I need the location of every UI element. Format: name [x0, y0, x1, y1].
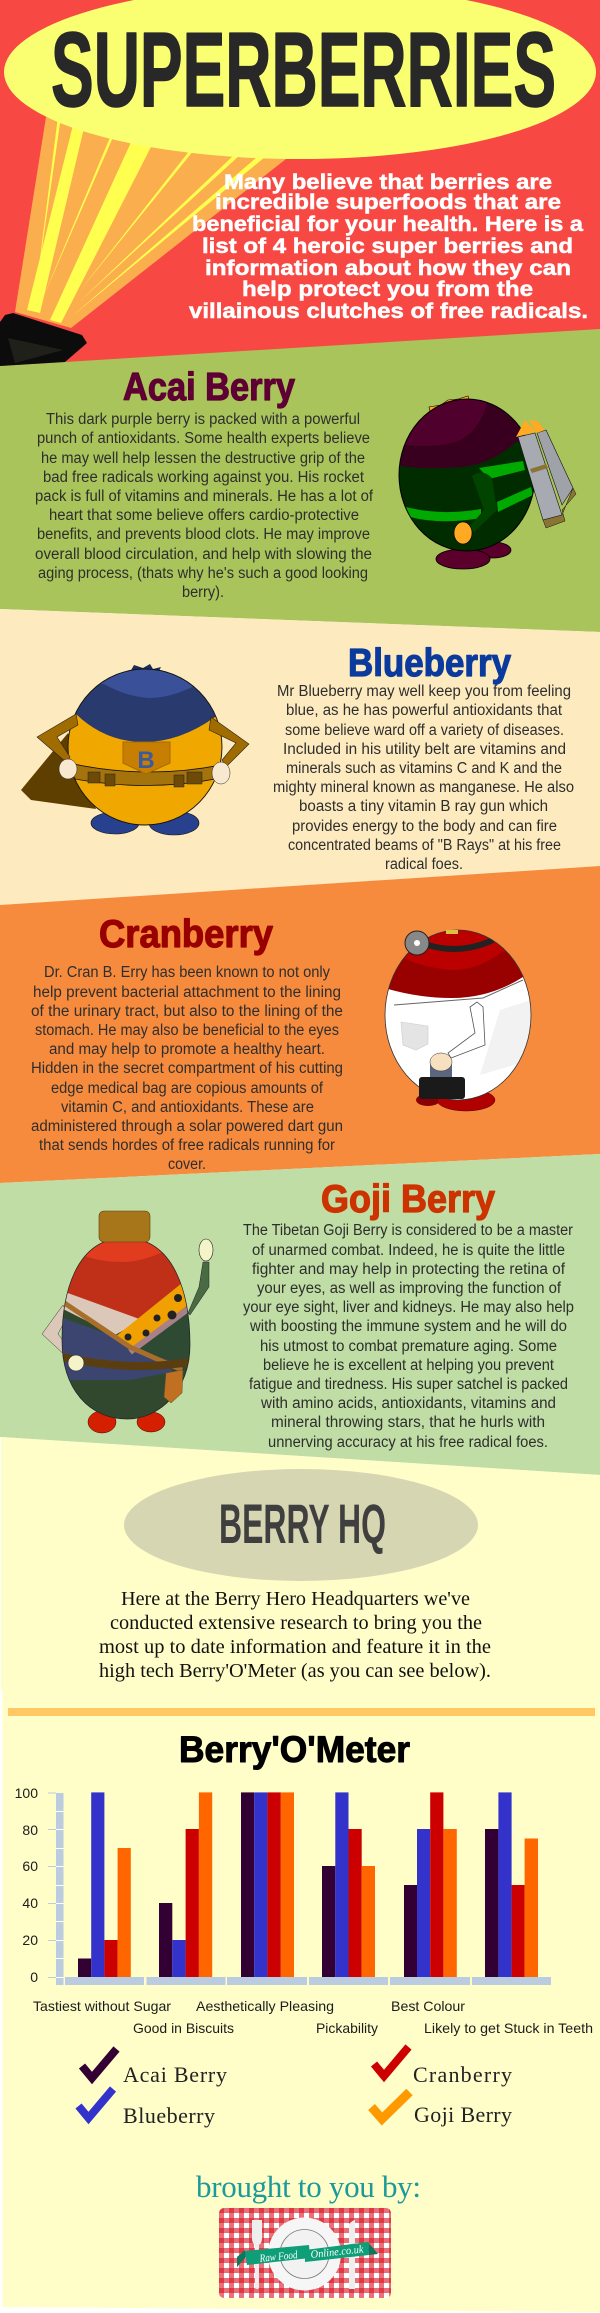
text block: goji berry description: fighter and may help in protecting the retina of	[252, 1261, 566, 1278]
panel: acai berry band	[0, 329, 600, 632]
icon: acai berry hero	[395, 390, 576, 569]
text block: goji berry description: his utmost to combat premature aging. Some	[260, 1338, 557, 1355]
legend: blueberry: Blueberry	[123, 2103, 215, 2128]
text block: intro: help protect you from the	[242, 278, 533, 301]
text block: cranberry description: and may help to promote a healthy heart.	[49, 1041, 325, 1058]
text block: intro: list of 4 heroic super berries and	[202, 235, 573, 258]
legend: acai berry: Acai Berry	[123, 2062, 227, 2087]
text block: goji berry description: with amino acids, antioxidants, vitamins and	[260, 1395, 556, 1412]
text block: acai berry description: benefits, and prevents blood clots. He may improve	[37, 526, 370, 543]
text block: cranberry description: help prevent bacterial attachment to the lining	[33, 984, 341, 1001]
chart axis frame	[48, 1792, 551, 1985]
heading: acai berry: Acai Berry	[123, 366, 295, 409]
legend: goji berry	[372, 2092, 512, 2127]
icon: title ellipse	[4, 0, 596, 159]
legend	[78, 2047, 512, 2128]
bars: good in biscuits	[159, 1792, 212, 1977]
text block: cranberry description: stomach. He may also be beneficial to the eyes	[35, 1022, 339, 1039]
text block: intro: beneficial for your health. Here is a	[192, 213, 583, 236]
text block: brought to you by: brought to you by:	[196, 2169, 421, 2204]
chart y axis labels: 0	[30, 1969, 38, 1985]
text block: goji berry description: mineral throwing stars, that he hurls with	[271, 1414, 545, 1431]
text block: blueberry description: blue, as he has powerful antioxidants that	[286, 702, 563, 719]
chart x axis labels: Tastiest without Sugar	[33, 1998, 171, 2014]
text block: acai berry description: aging process, (thats why he's such a good looking	[38, 565, 368, 582]
heading: goji berry: Goji Berry	[321, 1178, 495, 1221]
text block: cranberry description: of the urinary tract, but also to the lining of the	[31, 1003, 343, 1020]
text block: intro: villainous clutches of free radicals.	[189, 300, 588, 323]
legend: acai berry	[82, 2049, 227, 2087]
icon: blueberry hero: B	[137, 747, 155, 774]
text block: blueberry description: provides energy to the body and can fire	[292, 818, 557, 835]
text block: acai berry description	[35, 411, 374, 601]
legend: blueberry	[78, 2089, 215, 2128]
bars: likely to get stuck in teeth	[485, 1792, 538, 1977]
panel: header background	[0, 0, 600, 370]
legend: goji berry: Goji Berry	[414, 2102, 512, 2127]
text block: goji berry description	[243, 1222, 574, 1451]
text block: cranberry description: administered through a solar powered dart gun	[31, 1118, 343, 1135]
bars: pickability	[322, 1792, 375, 1977]
icon: flashlight	[0, 313, 87, 366]
text block: berry hq description: conducted extensive research to bring you the	[110, 1612, 482, 1634]
panel: goji berry band	[0, 1154, 600, 1475]
text block: acai berry description: bad free radicals working against you. His rocket	[43, 469, 365, 486]
text block: acai berry description: heart that some believe offers cardio-protective	[49, 507, 359, 524]
text block: blueberry description: some believe ward off a variety of diseases.	[285, 722, 564, 739]
icon: raw food online logo	[219, 2208, 391, 2298]
icon: raw food online logo: Online.co.uk	[310, 2243, 365, 2261]
text block: goji berry description: believe he is excellent at helping you prevent	[263, 1357, 555, 1374]
text block: berry hq description	[99, 1588, 491, 1682]
text block: cranberry description	[31, 964, 343, 1173]
text block: blueberry description: Mr Blueberry may well keep you from feeling	[277, 683, 571, 700]
text block: cranberry description: vitamin C, and antioxidants. These are	[61, 1099, 314, 1116]
text block: blueberry description	[273, 683, 574, 873]
text block: acai berry description: punch of antioxidants. Some health experts believe	[37, 430, 370, 447]
chart y axis labels: 20	[22, 1932, 38, 1948]
chart x axis labels: Pickability	[316, 2020, 378, 2036]
bars: best colour	[404, 1792, 457, 1977]
panel: cranberry band	[0, 866, 600, 1183]
bars: aesthetically pleasing	[241, 1792, 294, 1977]
icon: spotlight beam	[15, 117, 286, 328]
text block: intro	[189, 171, 588, 323]
text block: goji berry description: The Tibetan Goji Berry is considered to be a master	[243, 1222, 573, 1239]
chart x axis labels	[33, 1998, 593, 2036]
text block: goji berry description: your eye sight, liver and kidneys. He may also help	[243, 1299, 574, 1316]
chart y axis labels	[15, 1785, 38, 1985]
chart y axis labels: 80	[22, 1822, 38, 1838]
chart x axis labels: Aesthetically Pleasing	[196, 1998, 334, 2014]
text block: goji berry description: of unarmed combat. Indeed, he is quite the little	[252, 1242, 565, 1259]
text block: berry hq description: high tech Berry'O'Meter (as you can see below).	[99, 1660, 491, 1682]
panel: berry hq background	[1, 1437, 600, 2312]
text block: cranberry description: Hidden in the secret compartment of his cutting	[31, 1060, 343, 1077]
text block: acai berry description: overall blood circulation, and help with slowing the	[35, 546, 372, 563]
text block: cranberry description: Dr. Cran B. Erry has been known to not only	[44, 964, 330, 981]
text block: blueberry description: concentrated beams of "B Rays" at his free	[288, 837, 561, 854]
icon: berry hq ellipse	[124, 1469, 478, 1581]
chart x axis labels: Likely to get Stuck in Teeth	[424, 2020, 593, 2036]
text block: intro: incredible superfoods that are	[215, 191, 561, 214]
icon: cranberry hero	[380, 925, 535, 1111]
text block: blueberry description: mighty mineral known as manganese. He also	[273, 779, 574, 796]
text block: acai berry description: he may well help lessen the destructive grip of the	[41, 450, 365, 467]
text block: blueberry description: minerals such as vitamins C and K and the	[286, 760, 562, 777]
text block: goji berry description: fatigue and tiredness. His super satchel is packed	[249, 1376, 568, 1393]
text block: goji berry description: with boosting the immune system and he will do	[249, 1318, 567, 1335]
text block: acai berry description: pack is full of vitamins and minerals. He has a lot of	[35, 488, 374, 505]
chart y axis labels: 60	[22, 1858, 38, 1874]
text block: intro: Many believe that berries are	[224, 171, 552, 194]
bar chart	[15, 1785, 593, 2036]
heading: berry'o'meter: Berry'O'Meter	[179, 1729, 410, 1770]
text block: blueberry description: radical foes.	[385, 856, 463, 873]
chart y axis labels: 100	[15, 1785, 38, 1801]
text block: acai berry description: berry).	[182, 584, 224, 601]
icon: raw food online logo: Raw Food	[258, 2249, 299, 2265]
text block: blueberry description: boasts a tiny vitamin B ray gun which	[299, 798, 548, 815]
legend: cranberry	[374, 2047, 512, 2087]
chart x axis labels: Good in Biscuits	[133, 2020, 234, 2036]
icon: blueberry hero	[21, 660, 249, 835]
text block: goji berry description: unnerving accuracy at his free radical foes.	[268, 1434, 548, 1451]
text block: berry hq description: most up to date information and feature it in the	[99, 1636, 491, 1658]
text block: acai berry description: This dark purple berry is packed with a powerful	[46, 411, 360, 428]
text block: intro: information about how they can	[205, 257, 571, 280]
icon: goji berry hero	[42, 1211, 213, 1433]
bars: tastiest without sugar	[78, 1792, 131, 1977]
text block: cranberry description: cover.	[168, 1156, 206, 1173]
chart x axis labels: Best Colour	[391, 1998, 465, 2014]
panel: blueberry band	[0, 609, 600, 905]
heading: blueberry: Blueberry	[348, 642, 511, 685]
text block: blueberry description: Included in his utility belt are vitamins and	[283, 741, 566, 758]
heading: cranberry: Cranberry	[99, 913, 273, 956]
chart y axis labels: 40	[22, 1895, 38, 1911]
legend: cranberry: Cranberry	[413, 2062, 512, 2087]
text block: cranberry description: that sends hordes of free radicals running for	[39, 1137, 335, 1154]
heading: berry hq: BERRY HQ	[219, 1492, 386, 1555]
text block: goji berry description: your eyes, as well as improving the function of	[257, 1280, 562, 1297]
text block: cranberry description: edge medical bag are copious amounts of	[51, 1080, 324, 1097]
text block: berry hq description: Here at the Berry Hero Headquarters we've	[121, 1588, 470, 1610]
